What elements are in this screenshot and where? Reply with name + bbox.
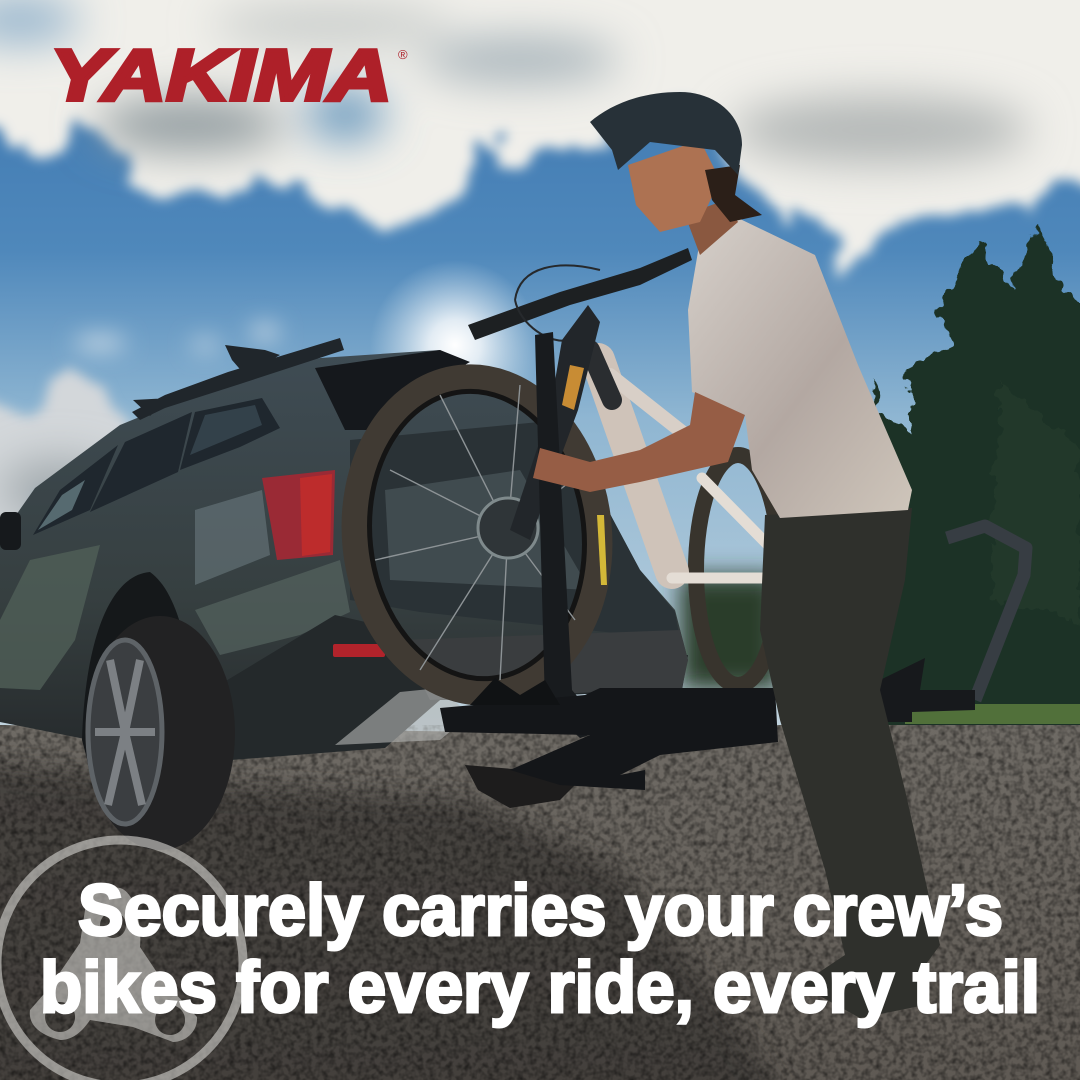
- rim: [88, 640, 162, 824]
- rack mast: [535, 332, 605, 738]
- headline: Securely carries your crew’s: [78, 871, 1003, 951]
- rear bike wheel: [339, 365, 615, 705]
- front bike wheel: [696, 455, 780, 685]
- wheel arch: [82, 572, 195, 770]
- rack end section: [880, 658, 975, 722]
- headline: [40, 871, 1040, 1028]
- man: [533, 92, 940, 1018]
- logo: YAKIMA: [50, 36, 392, 116]
- side windows: [33, 398, 280, 535]
- tray: [440, 688, 778, 790]
- headline: bikes for every ride, every trail: [40, 948, 1040, 1028]
- hair: [705, 165, 762, 222]
- roof rack bars: [132, 338, 344, 420]
- tire cradle: [470, 678, 560, 705]
- helmet: [590, 92, 742, 175]
- t-shirt: [688, 218, 912, 518]
- chain link: [30, 887, 197, 1042]
- rack hook bars: [947, 526, 1026, 700]
- far rear tire: [465, 765, 585, 808]
- wheel spokes: [375, 385, 585, 680]
- tailgate reflection: [350, 420, 680, 640]
- trees: [868, 225, 1080, 735]
- car: [0, 338, 688, 850]
- tire lettering stripe: [597, 515, 607, 585]
- rear tire: [85, 616, 235, 850]
- car body: [0, 350, 688, 762]
- logo: ®: [398, 47, 408, 62]
- icon ring: [0, 840, 243, 1080]
- lower bumper: [186, 615, 688, 762]
- rear window: [315, 350, 470, 430]
- rim spokes: [95, 660, 155, 805]
- tail light: [262, 470, 335, 560]
- suspension stanchion: [562, 365, 584, 410]
- tattooed arm: [533, 392, 745, 492]
- clouds: [0, 0, 1080, 530]
- mirror: [0, 512, 21, 550]
- bike hub: [478, 498, 538, 558]
- face: [628, 140, 720, 232]
- white bike frame: [590, 350, 768, 578]
- background foliage behind front wheel: [680, 575, 780, 690]
- gravel ground: [0, 725, 1080, 1080]
- bike chain icon in circle: [0, 840, 243, 1080]
- trousers: [760, 508, 940, 1018]
- handlebar: [468, 248, 692, 340]
- fork and stem: [510, 305, 600, 540]
- bike rack and bike: [339, 248, 1026, 790]
- reflective door panels: [195, 490, 270, 585]
- handlebar cables: [515, 265, 600, 341]
- neck: [685, 200, 738, 255]
- sun glow: [370, 260, 540, 430]
- photo background: sky: [0, 0, 1080, 760]
